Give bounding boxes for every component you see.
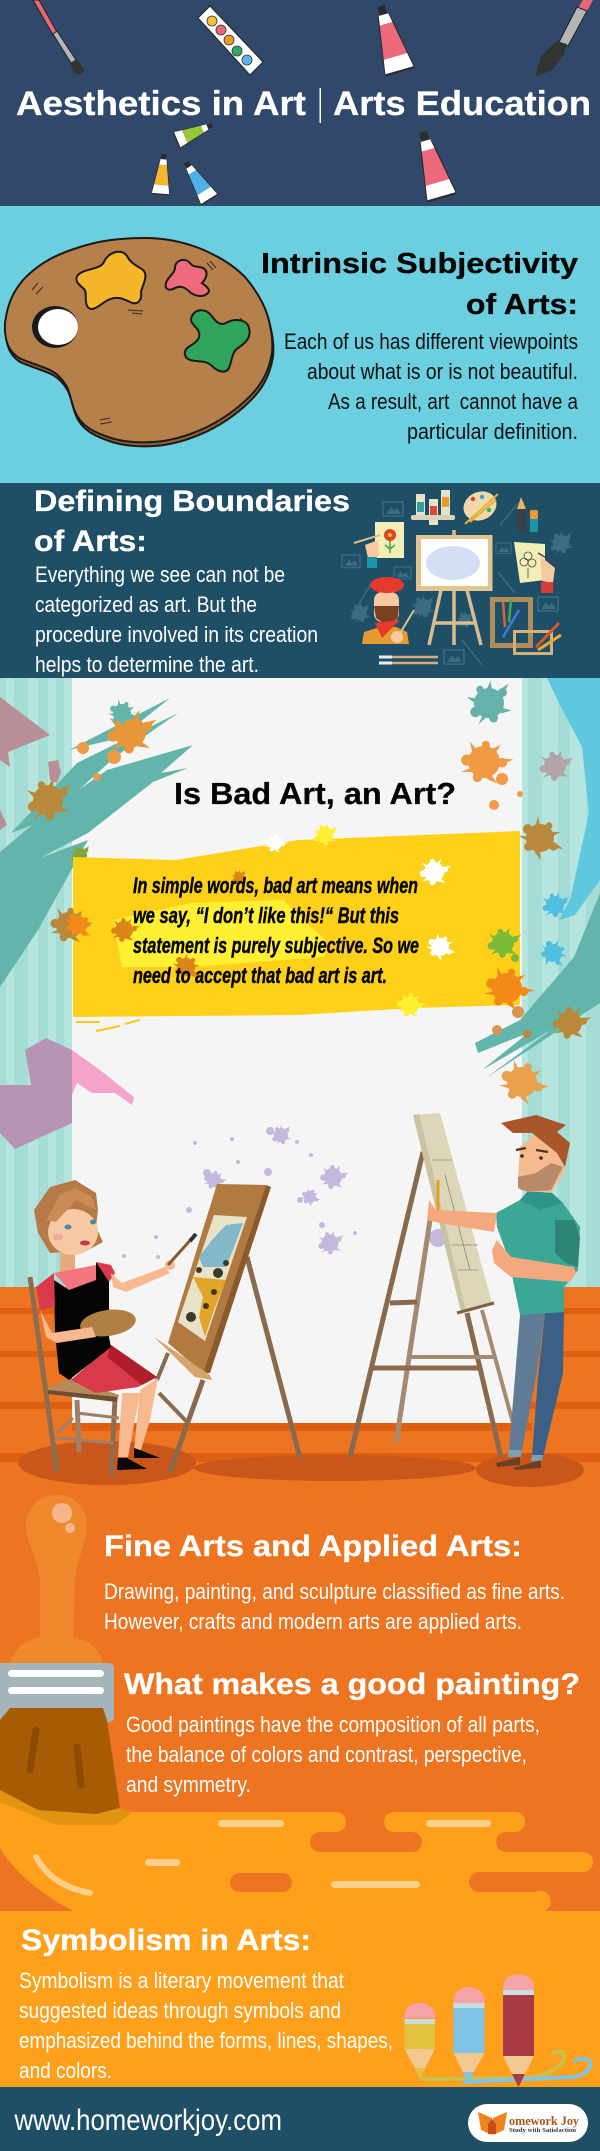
text block: good painting [126, 1712, 540, 1797]
logo: homework joy [468, 2104, 588, 2142]
text block: bad art: need to accept that bad art is art. [133, 963, 387, 988]
paint: mauve shapes [0, 697, 61, 830]
blue pencil [454, 1987, 484, 2083]
panel: symbolism [0, 1911, 600, 2087]
yellow pencil [404, 2003, 435, 2080]
neck [60, 1250, 75, 1272]
icon: green paint tube [173, 117, 215, 148]
website url: www.homeworkjoy.com [14, 2104, 282, 2137]
icon: small paint brush [33, 0, 85, 75]
heading: defining boundaries: Defining Boundaries [34, 485, 350, 518]
text block: bad art [133, 873, 419, 988]
icon: book [478, 2112, 507, 2135]
text block: good painting: the balance of colors and contrast, perspective, [126, 1742, 527, 1767]
text block: boundaries: categorized as art. But the [35, 592, 257, 617]
purple splatters [122, 1124, 447, 1259]
picture frames [492, 600, 561, 654]
text block: boundaries [35, 562, 318, 677]
heading: defining boundaries [34, 485, 350, 558]
text block: boundaries: helps to determine the art. [35, 652, 259, 677]
text block: symbolism: suggested ideas through symbols and [19, 1998, 341, 2023]
panel: is bad art [0, 678, 600, 1487]
red pencil [503, 1974, 534, 2087]
brushes [379, 657, 438, 663]
text block: bad art: In simple words, bad art means when [133, 873, 418, 898]
icon: pink paint tube lower [408, 128, 457, 203]
floor bands [0, 1308, 600, 1462]
legs [118, 1378, 158, 1457]
yellow paint spill [0, 1790, 593, 1911]
small palette [459, 486, 501, 526]
head [34, 1180, 103, 1255]
text block: viewpoints [284, 329, 579, 444]
heading: intrinsic subjectivity: Intrinsic Subjectivity [261, 248, 578, 280]
text block: symbolism: Symbolism is a literary movement that [19, 1968, 345, 1993]
paint: teal strokes right [475, 893, 600, 1078]
title [16, 85, 591, 123]
floor shadows [18, 1441, 584, 1487]
text block: viewpoints: particular definition. [407, 419, 578, 444]
jeans [508, 1312, 564, 1461]
artist with beret [362, 577, 414, 644]
icon: pencils [404, 1974, 590, 2087]
man painter [427, 1115, 580, 1470]
paint: teal strokes left [0, 698, 193, 987]
text block: bad art: statement is purely subjective. So we [133, 933, 419, 958]
arm with palette [40, 1310, 96, 1343]
heading: intrinsic subjectivity [261, 248, 578, 321]
easel with canvas: right [350, 1113, 513, 1457]
easel with canvas [416, 530, 492, 645]
title: Aesthetics in Art [16, 85, 307, 123]
wall [72, 678, 522, 1423]
orange pill cutout [230, 1873, 292, 1892]
shoes [496, 1457, 541, 1470]
heading: fine arts: Fine Arts and Applied Arts: [104, 1530, 522, 1563]
text block: symbolism: and colors. [19, 2058, 112, 2083]
art tubes [411, 490, 455, 525]
skirt [71, 1345, 157, 1393]
icon: pink paint tube [366, 2, 415, 77]
text block: symbolism: emphasized behind the forms, lines, shapes, [19, 2028, 393, 2053]
icon: yellow paint tube [151, 153, 173, 196]
paint: blue stroke [547, 678, 600, 920]
palette [78, 1306, 138, 1340]
shirt [496, 1200, 580, 1315]
illustration: art supplies cluster [342, 486, 573, 665]
icon: blue paint tube [178, 157, 218, 205]
heading: intrinsic subjectivity: of Arts: [466, 289, 578, 321]
dress [54, 1262, 111, 1380]
text block: symbolism [19, 1968, 393, 2083]
text block: good painting: and symmetry. [126, 1772, 251, 1797]
footer [0, 2087, 600, 2151]
easel with painting: left [154, 1184, 300, 1472]
drawing with flower [354, 522, 404, 568]
panel: fine arts and painting [0, 1487, 600, 1912]
panel: defining boundaries [0, 483, 600, 678]
heading: is bad art: Is Bad Art, an Art? [174, 776, 456, 811]
yellow paint band [42, 821, 539, 1038]
title: Arts Education [333, 85, 591, 123]
collar [54, 1265, 98, 1290]
curtains [0, 678, 600, 1287]
arms [427, 1200, 576, 1282]
chair [30, 1277, 119, 1475]
text block: boundaries: Everything we see can not be [35, 562, 285, 587]
shoes [117, 1448, 160, 1470]
text block: bad art: we say, “I don’t like this!“ But this [133, 903, 399, 928]
text block: fine arts: However, crafts and modern arts are applied arts. [104, 1609, 522, 1634]
woman painter [34, 1180, 196, 1470]
icon: large paint brush [0, 1495, 132, 1825]
drawing with sketch [514, 542, 562, 593]
heading: symbolism: Symbolism in Arts: [21, 1924, 311, 1957]
pencil and marker [517, 497, 538, 532]
heading: good painting: What makes a good painting? [124, 1668, 580, 1701]
header panel [0, 0, 600, 206]
sleeves [36, 1262, 115, 1310]
text block: fine arts [104, 1579, 565, 1634]
paint: pink shape [0, 1038, 134, 1149]
icon: artist palette [5, 238, 273, 446]
paint highlights [36, 1820, 491, 1893]
paint splats [22, 680, 595, 1112]
logo: homework joy: Study with Satisfaction [509, 2128, 577, 2134]
logo: homework joy: omework Joy [509, 2114, 580, 2128]
panel: intrinsic subjectivity [0, 206, 600, 483]
text block: boundaries: procedure involved in its creation [35, 622, 318, 647]
icon: large paint brush [535, 0, 593, 77]
icon: watercolor set [198, 6, 263, 75]
arm with brush [111, 1234, 196, 1292]
heading: defining boundaries: of Arts: [34, 525, 147, 558]
head [518, 1133, 564, 1193]
text block: good painting: Good paintings have the composition of all parts, [126, 1712, 540, 1737]
